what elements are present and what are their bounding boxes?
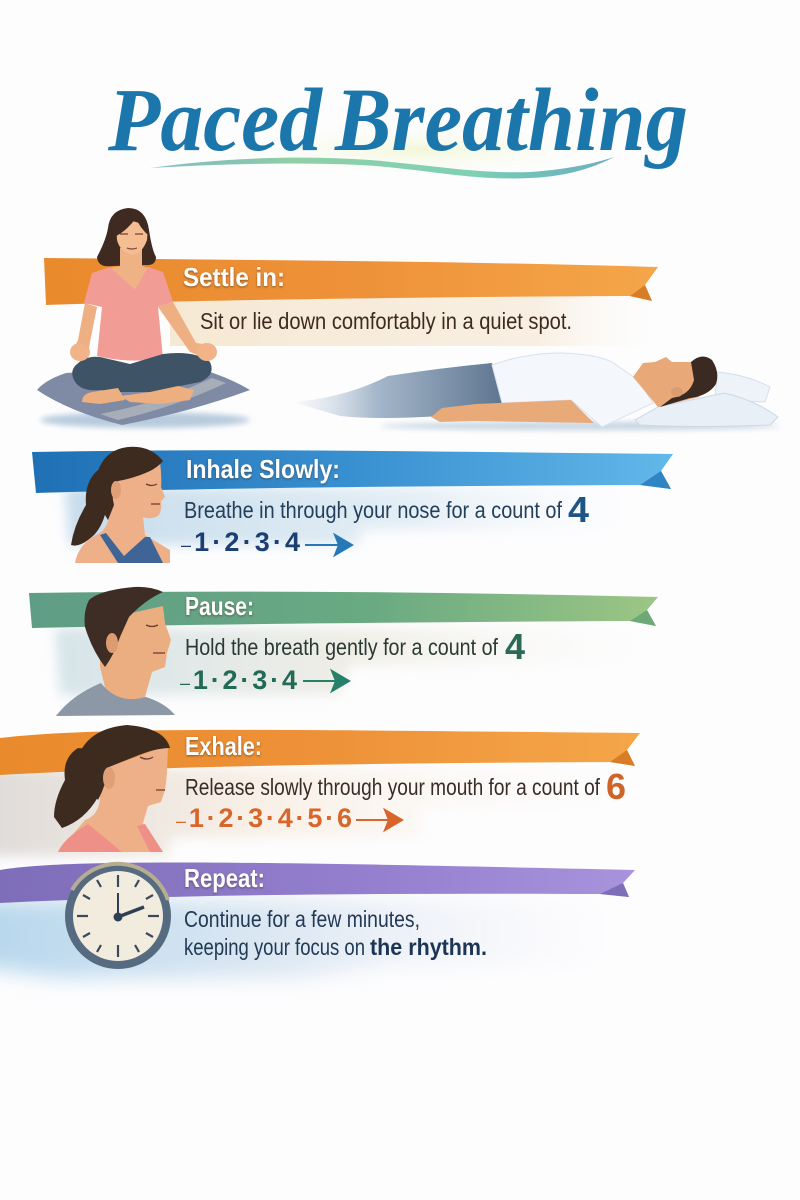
counter: –1·2·3·4·5·6 bbox=[176, 803, 352, 833]
feet bbox=[82, 386, 194, 404]
emphasis: the rhythm. bbox=[370, 934, 487, 960]
portrait: man pausing bbox=[56, 587, 175, 716]
panel: inhale bbox=[32, 447, 673, 563]
count number: 4 bbox=[505, 626, 525, 667]
tick marks bbox=[77, 875, 159, 957]
cushion bbox=[37, 366, 250, 425]
face bbox=[116, 221, 148, 255]
back pillow bbox=[715, 372, 770, 402]
ribbon fold bbox=[630, 610, 656, 626]
portrait: woman inhaling bbox=[71, 447, 170, 563]
body text: Hold the breath gently for a count of bbox=[185, 634, 499, 660]
top straps bbox=[100, 533, 163, 563]
heading: Inhale Slowly: bbox=[186, 454, 340, 484]
ear bbox=[671, 387, 683, 397]
title: Breathing bbox=[334, 71, 688, 170]
face detail bbox=[120, 234, 143, 249]
arrow bbox=[305, 535, 352, 555]
heading: Exhale: bbox=[185, 731, 262, 761]
hair bbox=[80, 725, 170, 800]
ribbon: purple bbox=[0, 862, 635, 903]
arm and hand bbox=[431, 400, 594, 423]
shirt bbox=[56, 683, 175, 716]
body text line 2: keeping your focus on bbox=[184, 934, 365, 960]
neck and head bbox=[633, 357, 704, 407]
ear bbox=[103, 767, 115, 789]
panel: settle in bbox=[44, 258, 660, 346]
eye and lips bbox=[140, 757, 165, 790]
title: Paced bbox=[107, 71, 324, 170]
icon: clock bbox=[65, 863, 171, 969]
clock face bbox=[73, 871, 163, 961]
hair back bbox=[97, 208, 156, 266]
count number: 6 bbox=[606, 766, 626, 807]
shirt bbox=[492, 353, 653, 427]
panel: repeat bbox=[0, 862, 635, 978]
count number: 4 bbox=[568, 489, 589, 530]
front pillow bbox=[635, 393, 778, 426]
ear bbox=[106, 633, 118, 653]
ponytail bbox=[54, 748, 101, 828]
ribbon fold bbox=[600, 883, 629, 897]
heading: Repeat: bbox=[184, 863, 265, 893]
clock rim bbox=[65, 863, 171, 969]
green wash bbox=[55, 628, 650, 695]
text background wash bbox=[170, 296, 660, 346]
ribbon: orange bbox=[44, 258, 658, 305]
legs bbox=[292, 363, 502, 418]
title bbox=[107, 71, 688, 180]
body text: Release slowly through your mouth for a count of bbox=[185, 774, 600, 800]
ribbon: blue bbox=[32, 450, 673, 493]
body text line 1: Continue for a few minutes, bbox=[184, 906, 420, 932]
blue wash bbox=[0, 900, 620, 978]
arms bbox=[72, 302, 210, 358]
panel: pause bbox=[29, 587, 658, 716]
arrow bbox=[303, 671, 349, 691]
portrait: woman exhaling bbox=[54, 725, 170, 852]
hair bbox=[84, 587, 163, 667]
body text: Sit or lie down comfortably in a quiet spot. bbox=[200, 308, 572, 334]
ponytail bbox=[71, 470, 108, 546]
arrow bbox=[356, 810, 402, 830]
body text: Breathe in through your nose for a count of bbox=[184, 497, 563, 523]
shirt bbox=[58, 824, 163, 852]
heading: Settle in: bbox=[183, 262, 285, 292]
neck bbox=[110, 248, 148, 290]
eye and lips bbox=[146, 625, 165, 653]
ribbon: green bbox=[29, 592, 658, 628]
hair bbox=[96, 447, 163, 520]
hands bbox=[70, 343, 90, 361]
counter: –1·2·3·4 bbox=[180, 665, 297, 695]
hair bbox=[660, 356, 717, 407]
heading: Pause: bbox=[185, 591, 254, 621]
ribbon fold bbox=[610, 750, 635, 766]
torso: pink shirt bbox=[84, 267, 173, 361]
warm wash bbox=[0, 768, 640, 856]
ribbon fold bbox=[630, 285, 652, 301]
counter: –1·2·3·4 bbox=[181, 527, 300, 557]
clock hands bbox=[117, 893, 119, 917]
cushion shadow bbox=[40, 412, 250, 428]
blue wash bbox=[65, 487, 640, 545]
eye and lips bbox=[146, 484, 160, 504]
skin bbox=[56, 606, 174, 715]
hair fringe bbox=[112, 212, 149, 238]
ground shadow bbox=[380, 422, 780, 430]
panel: exhale bbox=[0, 725, 640, 856]
ribbon: orange bbox=[0, 730, 640, 775]
skin bbox=[58, 745, 168, 852]
ear bbox=[111, 481, 121, 499]
legs bbox=[72, 353, 212, 392]
skin bbox=[75, 462, 170, 563]
ribbon fold bbox=[640, 471, 671, 489]
illustration: seated meditating woman bbox=[37, 208, 250, 428]
title swoosh bbox=[150, 157, 614, 178]
illustration: man lying down bbox=[292, 353, 780, 430]
